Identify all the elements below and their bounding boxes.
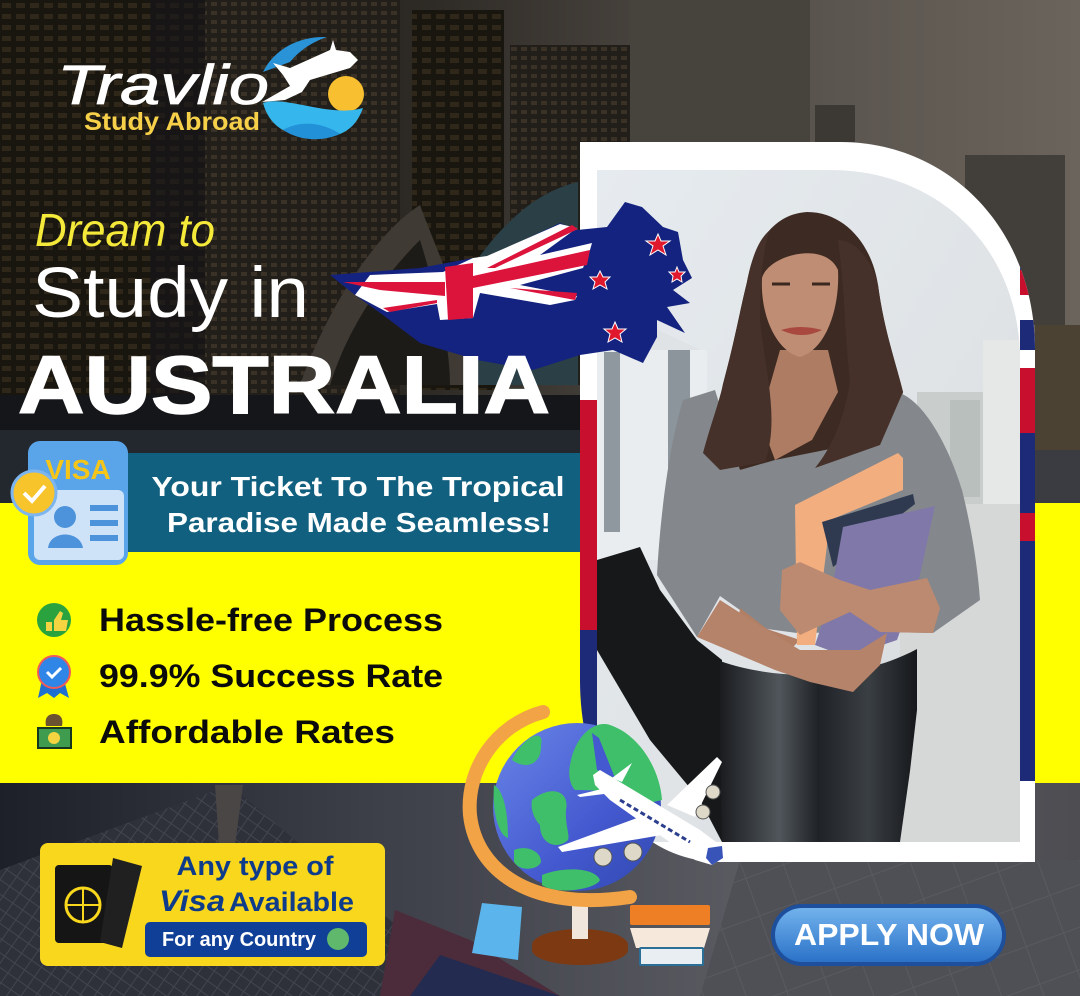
background: bottom building bbox=[0, 783, 1080, 996]
logo wordmark: Travlio bbox=[57, 53, 269, 116]
visa availability badge: For any Country bbox=[162, 929, 317, 951]
hair back bbox=[703, 212, 903, 470]
background: city skyline bbox=[0, 0, 1080, 505]
badge title: Any type of bbox=[176, 851, 335, 881]
globe stand bbox=[532, 905, 628, 965]
books bbox=[795, 453, 935, 657]
leather pants bbox=[720, 649, 917, 842]
sweater bbox=[657, 390, 980, 637]
photo: student bbox=[597, 170, 1020, 842]
feature list bbox=[37, 602, 443, 750]
visa availability badge bbox=[40, 843, 385, 966]
feature: affordable rates: Affordable Rates bbox=[99, 714, 395, 750]
visa availability badge: Visa bbox=[159, 885, 225, 918]
flag stars bbox=[590, 234, 685, 342]
neck and chest bbox=[769, 350, 838, 460]
badge pill bbox=[145, 922, 367, 957]
logo bbox=[57, 37, 364, 139]
apply now button bbox=[771, 904, 1006, 966]
continents bbox=[494, 724, 662, 890]
flag brush stroke bbox=[330, 202, 692, 370]
hair locks bbox=[703, 230, 903, 470]
apply now button: APPLY NOW bbox=[794, 917, 985, 952]
icon: passport and tickets bbox=[55, 858, 142, 948]
feature: success rate: 99.9% Success Rate bbox=[99, 658, 443, 694]
logo tagline: Study Abroad bbox=[84, 108, 260, 136]
heading: australia: AUSTRALIA bbox=[18, 340, 550, 431]
yellow band bbox=[0, 503, 1080, 783]
globe sphere bbox=[493, 723, 661, 891]
icon: visa card bbox=[12, 441, 128, 565]
visa banner: Paradise Made Seamless! bbox=[167, 507, 551, 538]
globe arm bbox=[470, 712, 630, 900]
heading: dream to: Dream to bbox=[35, 204, 215, 256]
visa banner bbox=[100, 453, 580, 552]
photo frame bbox=[580, 142, 1035, 862]
airplane bbox=[558, 733, 723, 866]
heading: study in: Study in bbox=[32, 254, 309, 333]
face bbox=[762, 253, 838, 357]
feature: success rate bbox=[38, 656, 443, 698]
logo emblem bbox=[262, 37, 364, 139]
midriff bbox=[740, 608, 797, 646]
globe with airplane bbox=[470, 712, 723, 965]
feature: hassle-free process: Hassle-free Process bbox=[99, 602, 443, 638]
visa availability badge: Available bbox=[229, 887, 354, 917]
opera house bbox=[300, 205, 480, 385]
icon: visa card: VISA bbox=[45, 454, 111, 485]
books and notebook bbox=[472, 903, 710, 965]
flag stripes on frame bbox=[580, 240, 1035, 781]
backpack bbox=[597, 547, 722, 842]
banner text: Your Ticket To The Tropical bbox=[152, 471, 564, 502]
facial features bbox=[772, 284, 830, 335]
arms and hands bbox=[780, 562, 940, 635]
